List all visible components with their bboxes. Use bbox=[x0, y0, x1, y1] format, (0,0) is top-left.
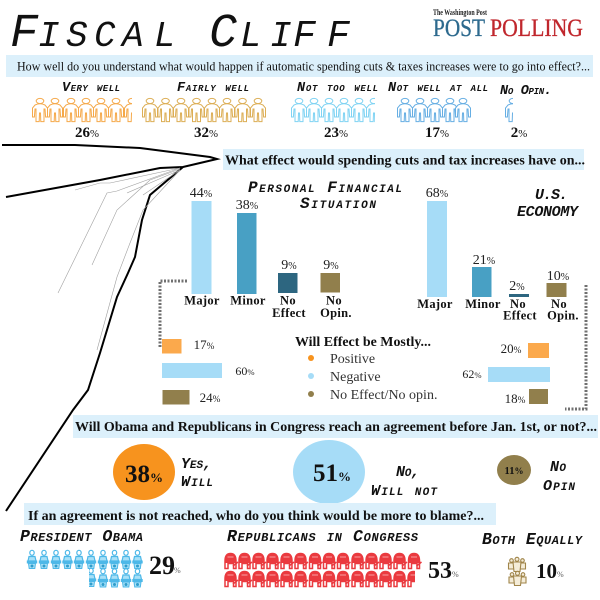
bubble: yes, will: Yes, bbox=[181, 456, 212, 473]
bar chart: personal financial situation: No bbox=[280, 294, 296, 308]
bar chart: u.s. economy: No bbox=[551, 297, 567, 311]
legend: will effect be mostly: Negative bbox=[330, 370, 381, 385]
heading: u.s. economy bbox=[517, 187, 580, 221]
panel: president obama bbox=[20, 527, 181, 587]
panel: no opinion: 2% bbox=[511, 125, 527, 141]
panel: not well at all: Not well at all bbox=[388, 81, 488, 96]
panel: fairly well bbox=[142, 81, 266, 141]
legend: will effect be mostly: Will Effect be Mostly... bbox=[295, 334, 431, 349]
panel: blame question: If an agreement is not reached, who do you think would be more to blame?... bbox=[28, 508, 484, 523]
panel: agreement question bbox=[73, 415, 598, 438]
panel: very well: Very well bbox=[62, 81, 120, 96]
bar chart: u.s. economy: Effect bbox=[503, 308, 537, 322]
bar chart: personal financial situation: Minor bbox=[230, 294, 266, 308]
panel: effect question: What effect would spending cuts and tax increases have on... bbox=[225, 152, 585, 168]
heading: u.s. economy: ECONOMY bbox=[517, 204, 580, 221]
panel: president obama: President Obama bbox=[20, 527, 143, 546]
bar chart: personal financial situation: Opin. bbox=[320, 306, 352, 320]
panel: very well bbox=[32, 81, 140, 141]
heading: u.s. economy: U.S. bbox=[535, 187, 568, 204]
bar chart: u.s. economy: Opin. bbox=[547, 308, 579, 322]
bar chart: u.s. economy: 2% bbox=[509, 279, 525, 294]
panel: fairly well: Fairly well bbox=[177, 81, 249, 96]
bar chart: personal effect direction bbox=[162, 337, 255, 405]
title: C bbox=[209, 8, 237, 61]
bar chart: u.s. economy: Major bbox=[417, 297, 453, 311]
bar chart: personal effect direction: 24% bbox=[200, 390, 221, 405]
panel: president obama: 29 bbox=[149, 551, 175, 580]
legend: will effect be mostly bbox=[295, 334, 437, 403]
panel: republicans in congress bbox=[225, 527, 459, 586]
panel: not too well bbox=[292, 81, 382, 141]
bubble: no, will not: No, bbox=[396, 464, 420, 481]
bar chart: personal financial situation: Major bbox=[184, 294, 220, 308]
connector: economy to mostly bars bbox=[565, 285, 586, 409]
heading: personal financial situation: Personal Financial bbox=[248, 179, 402, 197]
bar chart: u.s. economy: 68% bbox=[426, 186, 449, 201]
bar chart: personal effect direction: 60% bbox=[235, 364, 255, 378]
bubble: yes, will: 38% bbox=[125, 461, 163, 488]
panel: blame question bbox=[24, 503, 496, 525]
bar chart: economy effect direction bbox=[462, 341, 550, 406]
panel: both equally: Both Equally bbox=[482, 530, 584, 549]
bar chart: personal financial situation: 9% bbox=[281, 258, 297, 273]
title: LI bbox=[240, 16, 292, 57]
logo: Post Polling: POLLING bbox=[490, 15, 583, 42]
panel: no opinion: No Opin. bbox=[500, 84, 552, 99]
bubble: no, will not: Will not bbox=[371, 483, 438, 500]
bar chart: economy effect direction: 18% bbox=[505, 391, 526, 406]
panel: both equally bbox=[482, 530, 584, 586]
bubble: no, will not bbox=[293, 440, 438, 504]
connector: personal to mostly bars bbox=[160, 281, 187, 347]
bubble: yes, will bbox=[113, 444, 213, 500]
panel: not too well: Not too well bbox=[297, 81, 378, 96]
legend: will effect be mostly: No Effect/No opin. bbox=[330, 388, 437, 403]
bar chart: personal financial situation: 9% bbox=[323, 258, 339, 273]
bar chart: economy effect direction: 20% bbox=[501, 341, 522, 356]
bubble: no, will not: 51% bbox=[313, 460, 351, 487]
panel: understanding question bbox=[6, 55, 593, 77]
logo: Post Polling: POST bbox=[433, 15, 485, 42]
panel: not well at all bbox=[388, 81, 488, 141]
bar chart: personal effect direction: 17% bbox=[194, 337, 215, 352]
panel: no opinion bbox=[500, 84, 552, 141]
panel: republicans in congress: % bbox=[452, 570, 459, 579]
bar chart: personal financial situation: No bbox=[326, 294, 342, 308]
logo: Post Polling: The Washington Post bbox=[433, 8, 487, 17]
bar chart: personal financial situation bbox=[184, 186, 352, 320]
bar chart: u.s. economy: 21% bbox=[473, 253, 496, 268]
bubble: yes, will: Will bbox=[181, 474, 213, 491]
panel: both equally: 10 bbox=[536, 559, 557, 583]
title: ISCAL bbox=[38, 16, 176, 57]
panel: effect question bbox=[223, 149, 585, 170]
bar chart: u.s. economy: No bbox=[510, 297, 526, 311]
bar chart: personal financial situation: Effect bbox=[272, 306, 306, 320]
bubble: no opinion: Opin bbox=[543, 478, 575, 495]
bar chart: economy effect direction: 62% bbox=[462, 367, 482, 381]
bubble: no opinion: 11% bbox=[505, 466, 523, 477]
bar chart: u.s. economy: Minor bbox=[465, 297, 501, 311]
bar chart: personal financial situation: 44% bbox=[190, 186, 213, 201]
bubble: no opinion bbox=[497, 455, 575, 495]
panel: agreement question: Will Obama and Republicans in Congress reach an agreement before Jan. 1st, or not?... bbox=[75, 419, 597, 434]
panel: both equally: % bbox=[557, 570, 564, 579]
logo: Post Polling bbox=[433, 8, 583, 42]
panel: very well: 26% bbox=[75, 125, 99, 141]
bar chart: personal financial situation: 38% bbox=[236, 198, 259, 213]
panel: not well at all: 17% bbox=[425, 125, 449, 141]
bar chart: u.s. economy bbox=[417, 186, 579, 322]
title: F bbox=[10, 8, 39, 61]
title: FF bbox=[293, 15, 351, 58]
heading: personal financial situation: Situation bbox=[300, 195, 376, 213]
panel: not too well: 23% bbox=[324, 125, 348, 141]
heading: personal financial situation bbox=[248, 179, 402, 213]
bar chart: u.s. economy: 10% bbox=[547, 269, 570, 284]
illustration: cliff edge bbox=[2, 145, 217, 511]
bubble: no opinion: No bbox=[550, 459, 566, 476]
legend: will effect be mostly: Positive bbox=[330, 352, 375, 367]
panel: president obama: % bbox=[174, 566, 181, 575]
panel: republicans in congress: Republicans in Congress bbox=[227, 527, 419, 546]
panel: republicans in congress: 53 bbox=[428, 558, 452, 584]
panel: fairly well: 32% bbox=[194, 125, 218, 141]
